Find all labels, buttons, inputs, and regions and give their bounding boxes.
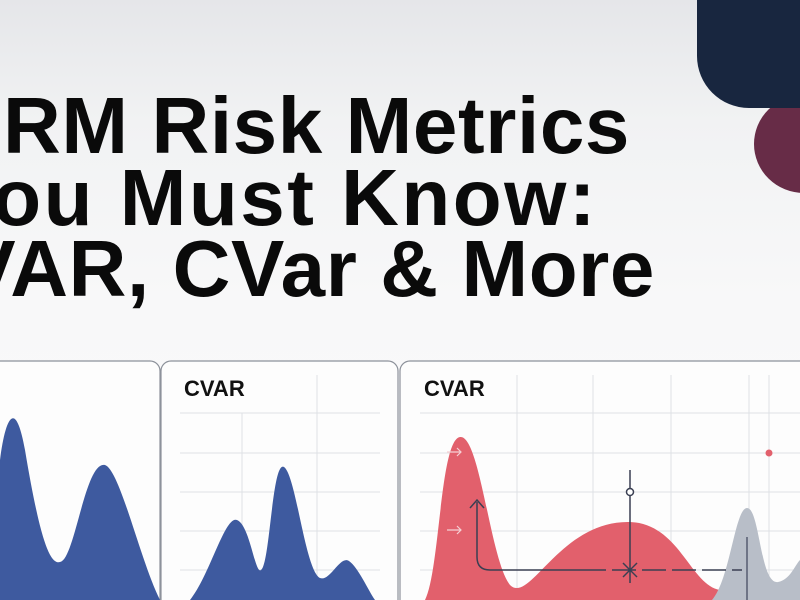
panel: middle CVAR chart (161, 361, 398, 600)
panel: left chart (0, 361, 160, 600)
decorative maroon circle (754, 95, 800, 193)
panel: middle CVAR chart: CVAR (184, 376, 245, 401)
red distribution (425, 437, 740, 600)
gray distribution (712, 508, 800, 600)
panel: right CVAR chart (400, 361, 800, 600)
annotation lines (470, 470, 747, 600)
panel: right CVAR chart: CVAR (424, 376, 485, 401)
decorative navy shape (697, 0, 800, 108)
title (0, 81, 655, 310)
